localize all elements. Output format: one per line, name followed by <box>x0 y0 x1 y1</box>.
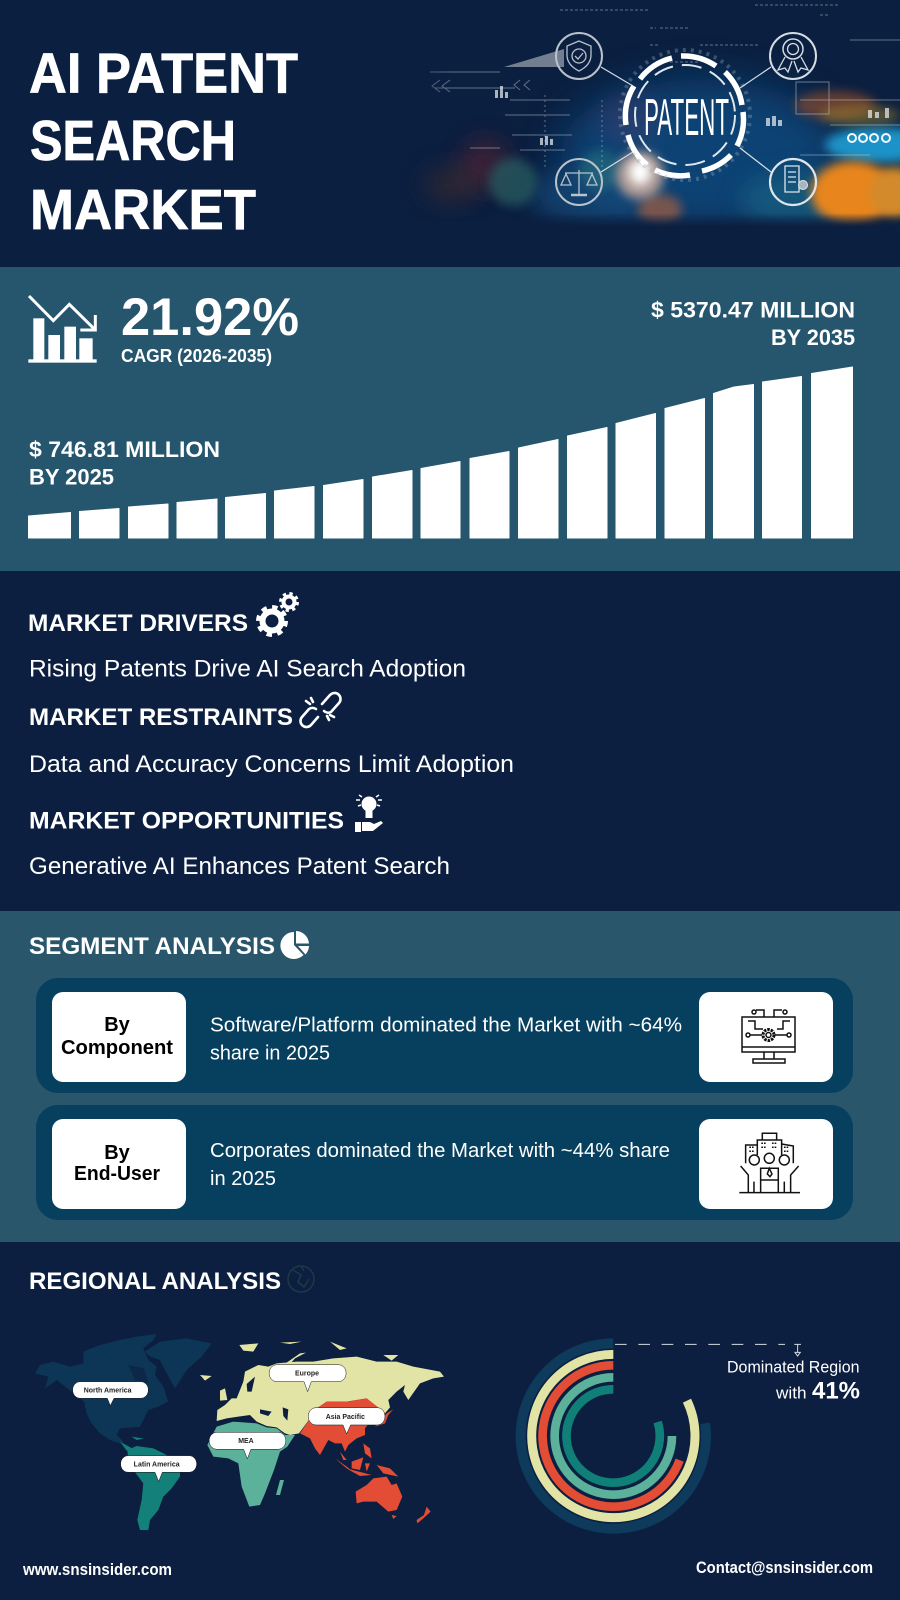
component share text: share in 2025 <box>210 1042 330 1064</box>
icon card: corporate people <box>699 1119 833 1209</box>
callout: North America: North America <box>84 1387 132 1394</box>
end-user share text: in 2025 <box>210 1167 276 1190</box>
dominated region callout: 41% <box>812 1378 860 1404</box>
title: MARKET <box>30 178 256 241</box>
value 2035: $ 5370.47 MILLION <box>651 298 855 322</box>
opportunity text: Generative AI Enhances Patent Search <box>29 853 450 880</box>
callout: North America <box>73 1382 148 1406</box>
end-user share text <box>210 1139 670 1190</box>
icon: growth chart <box>28 296 97 363</box>
data graphics <box>430 5 900 170</box>
value 2025: $ 746.81 MILLION <box>29 437 220 462</box>
label card: by component <box>52 992 186 1082</box>
component share text <box>210 1014 682 1064</box>
title: AI PATENT <box>29 42 298 104</box>
title <box>29 42 298 241</box>
dominated region callout: Dominated Region <box>727 1358 860 1376</box>
panel: segment analysis <box>0 911 900 1242</box>
CAGR label: CAGR (2026-2035) <box>121 346 272 366</box>
icon: bulb in hand <box>355 795 383 832</box>
icon: globe <box>288 1266 314 1292</box>
segment row: by end-user <box>36 1105 853 1220</box>
inland seas <box>228 1377 288 1422</box>
region: Asia Pacific <box>300 1398 431 1523</box>
panel: market dynamics <box>0 571 900 911</box>
region: Europe <box>200 1342 444 1435</box>
label card: by component: Component <box>61 1037 173 1059</box>
world map <box>35 1334 444 1530</box>
callout: Asia Pacific: Asia Pacific <box>326 1414 365 1421</box>
CAGR value: 21.92% <box>121 288 299 347</box>
region: Latin America <box>120 1437 180 1530</box>
circle icon: shield <box>556 33 602 79</box>
dominated region callout <box>727 1358 860 1404</box>
restraint text: Data and Accuracy Concerns Limit Adoption <box>29 751 514 778</box>
radial bar chart <box>521 1343 706 1529</box>
region: North America <box>35 1334 212 1443</box>
leader arrow <box>615 1344 801 1356</box>
patent ring: PATENT <box>644 89 729 147</box>
heading: market restraints: MARKET RESTRAINTS <box>29 704 293 731</box>
heading: market drivers: MARKET DRIVERS <box>28 610 248 637</box>
patent ring <box>601 50 771 180</box>
dominated region callout: with <box>775 1384 806 1402</box>
label card: by component: By <box>104 1014 131 1036</box>
icon: pie chart <box>280 931 309 959</box>
icon card: monitor with gear <box>699 992 833 1082</box>
heading: segment analysis: SEGMENT ANALYSIS <box>29 933 275 960</box>
end-user share text: Corporates dominated the Market with ~44% share <box>210 1139 670 1162</box>
callout: Latin America <box>121 1456 197 1482</box>
contact: Contact@snsinsider.com <box>696 1559 873 1577</box>
callout: Europe <box>269 1365 346 1392</box>
callout: Europe: Europe <box>295 1371 319 1378</box>
label card: by end-user: By <box>104 1142 131 1164</box>
callout: Asia Pacific <box>308 1408 385 1434</box>
panel: market size <box>0 267 900 571</box>
segment row: by component <box>36 978 853 1093</box>
value 2025 <box>29 437 220 490</box>
title: SEARCH <box>30 109 236 172</box>
icon: gears <box>258 594 298 635</box>
circle icon: medal <box>770 33 816 79</box>
panel: regional analysis <box>0 1242 900 1600</box>
callout: MEA: MEA <box>238 1438 254 1445</box>
callout: MEA <box>209 1432 286 1459</box>
heading: market opportunities: MARKET OPPORTUNITIES <box>29 808 344 834</box>
circle icon: document <box>770 159 816 205</box>
panel: header <box>30 4 900 230</box>
website: www.snsinsider.com <box>22 1561 172 1579</box>
icon: broken chain <box>300 693 341 727</box>
value 2035: BY 2035 <box>771 325 855 350</box>
label card: by end-user <box>52 1119 186 1209</box>
region: MEA <box>207 1422 295 1507</box>
circle icon: scales <box>556 159 602 205</box>
hero image: patent technology <box>423 4 900 226</box>
callout: Latin America: Latin America <box>134 1461 180 1468</box>
label card: by end-user: End-User <box>74 1163 160 1185</box>
value 2035 <box>651 298 855 350</box>
driver text: Rising Patents Drive AI Search Adoption <box>29 656 466 682</box>
component share text: Software/Platform dominated the Market with ~64% <box>210 1014 682 1036</box>
value 2025: BY 2025 <box>29 464 114 490</box>
heading: regional analysis: REGIONAL ANALYSIS <box>29 1268 281 1295</box>
bar chart <box>28 367 852 538</box>
